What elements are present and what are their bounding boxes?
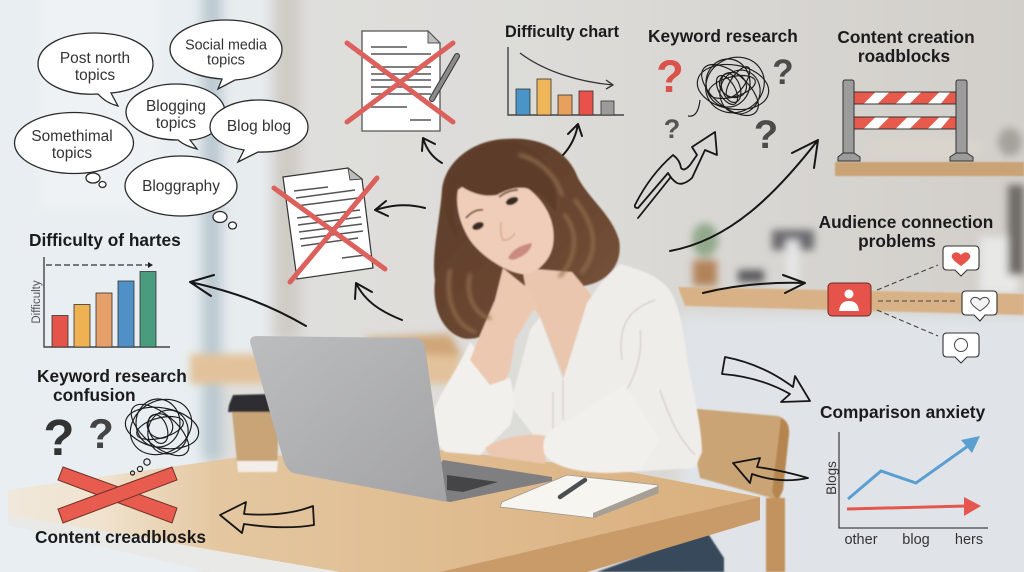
icon: dark question marks [43,409,114,466]
arrow to crossed document [422,138,442,163]
heading: Keyword research confusion: Keyword research [37,366,187,386]
speech bubble: Social media topics: Social media [185,38,267,54]
heading: Keyword research confusion: confusion [53,385,136,405]
outlined arrow to comparison chart [722,357,810,402]
icon: question marks: ? [754,113,778,157]
heading: Difficulty chart: Difficulty chart [505,23,620,41]
icon: audience profile [828,283,871,316]
outlined arrow to content creadblosks [220,502,314,533]
heading: Content creation roadblocks [837,27,975,66]
right cuff [543,385,660,473]
icon: dark question marks: ? [43,409,75,466]
crossed out document with pen [347,31,457,131]
wooden table [8,450,760,572]
heading: Audience connection problems: problems [858,231,936,251]
thought bubble: Bloggraphy: Bloggraphy [142,178,220,195]
blouse [510,264,702,473]
wooden chair [687,408,789,572]
left sleeve [433,342,514,455]
long arrow to roadblocks [670,140,818,251]
neck and chest [522,268,592,380]
speech bubble: Blogging topics [126,84,225,149]
line chart: Comparison anxiety: hers [955,532,983,548]
raised arm and hand [470,268,538,385]
coffee cup [228,394,281,472]
speech bubble: Post north topics: topics [75,67,115,84]
brows, eyes, nose, mouth [466,190,532,260]
arrow to tilted document [375,201,425,216]
icon: tangled scribble [688,47,774,125]
tilted crossed out document [274,168,385,282]
heading: Content creation roadblocks: roadblocks [858,46,950,66]
woman [433,139,702,473]
icon: heart bubble [943,246,979,276]
heading: Audience connection problems [819,212,993,251]
heading: Difficulty of hartes: Difficulty of hartes [29,230,181,250]
icon: roadblock barrier [838,80,973,161]
hair highlights [449,155,593,332]
thought bubble: Somethimal topics [14,112,134,188]
dashed connectors [877,265,955,336]
speech bubble: Blog blog: Blog blog [227,118,291,135]
icon: question marks: ? [656,51,684,102]
bar chart: Difficulty: Difficulty [31,280,43,324]
outlined zigzag arrow [635,132,717,218]
icon: thought scribble [120,388,202,475]
hair back [434,139,620,339]
thought bubble: Somethimal topics: Somethimal [31,128,113,145]
speech bubble: Post north topics: Post north [60,50,130,67]
speech bubble: Post north topics [38,33,153,106]
line chart: Comparison anxiety: blog [902,532,930,548]
notebook and pen [500,475,658,518]
icon: question marks: ? [772,53,794,92]
jeans [597,532,724,572]
bar chart: Difficulty chart [508,47,624,115]
heading: Audience connection problems: Audience connection [819,212,993,232]
speech bubble: Social media topics [170,20,282,89]
heading: Keyword research: Keyword research [648,26,798,46]
face [457,181,554,274]
arrow to audience icon [703,275,805,293]
outlined arrow from comparison chart [733,458,808,483]
icon: dark question marks: ? [88,410,114,457]
thought bubble: Bloggraphy [125,156,237,229]
heading: Comparison anxiety: Comparison anxiety [820,402,986,422]
heading: Keyword research confusion [37,366,187,405]
thought bubble: Somethimal topics: topics [52,145,92,162]
heading: Content creadblosks: Content creadblosks [35,527,206,547]
forearm [485,435,548,464]
speech bubble: Social media topics: topics [207,52,245,68]
line chart: Comparison anxiety: Blogs [824,461,839,495]
laptop [250,336,552,502]
arrow to difficulty chart [190,275,306,326]
arrow to difficulty chart top [563,124,582,155]
blouse folds [553,300,695,455]
icon: question marks: ? [664,114,680,144]
bar chart: Difficulty [31,257,170,347]
icon: comment bubble [943,333,979,363]
speech bubble: Blogging topics: Blogging [146,98,206,115]
arrow to tilted document from below [355,283,402,320]
line chart: Comparison anxiety [824,432,988,548]
speech bubble: Blogging topics: topics [156,115,196,132]
heading: Content creation roadblocks: Content creation [837,27,975,47]
icon: outlined heart bubble [962,291,997,321]
fringe [445,142,557,238]
icon: big red cross [58,467,177,523]
icon: question marks [656,51,794,157]
line chart: Comparison anxiety: other [844,532,878,548]
speech bubble: Blog blog [210,100,308,162]
